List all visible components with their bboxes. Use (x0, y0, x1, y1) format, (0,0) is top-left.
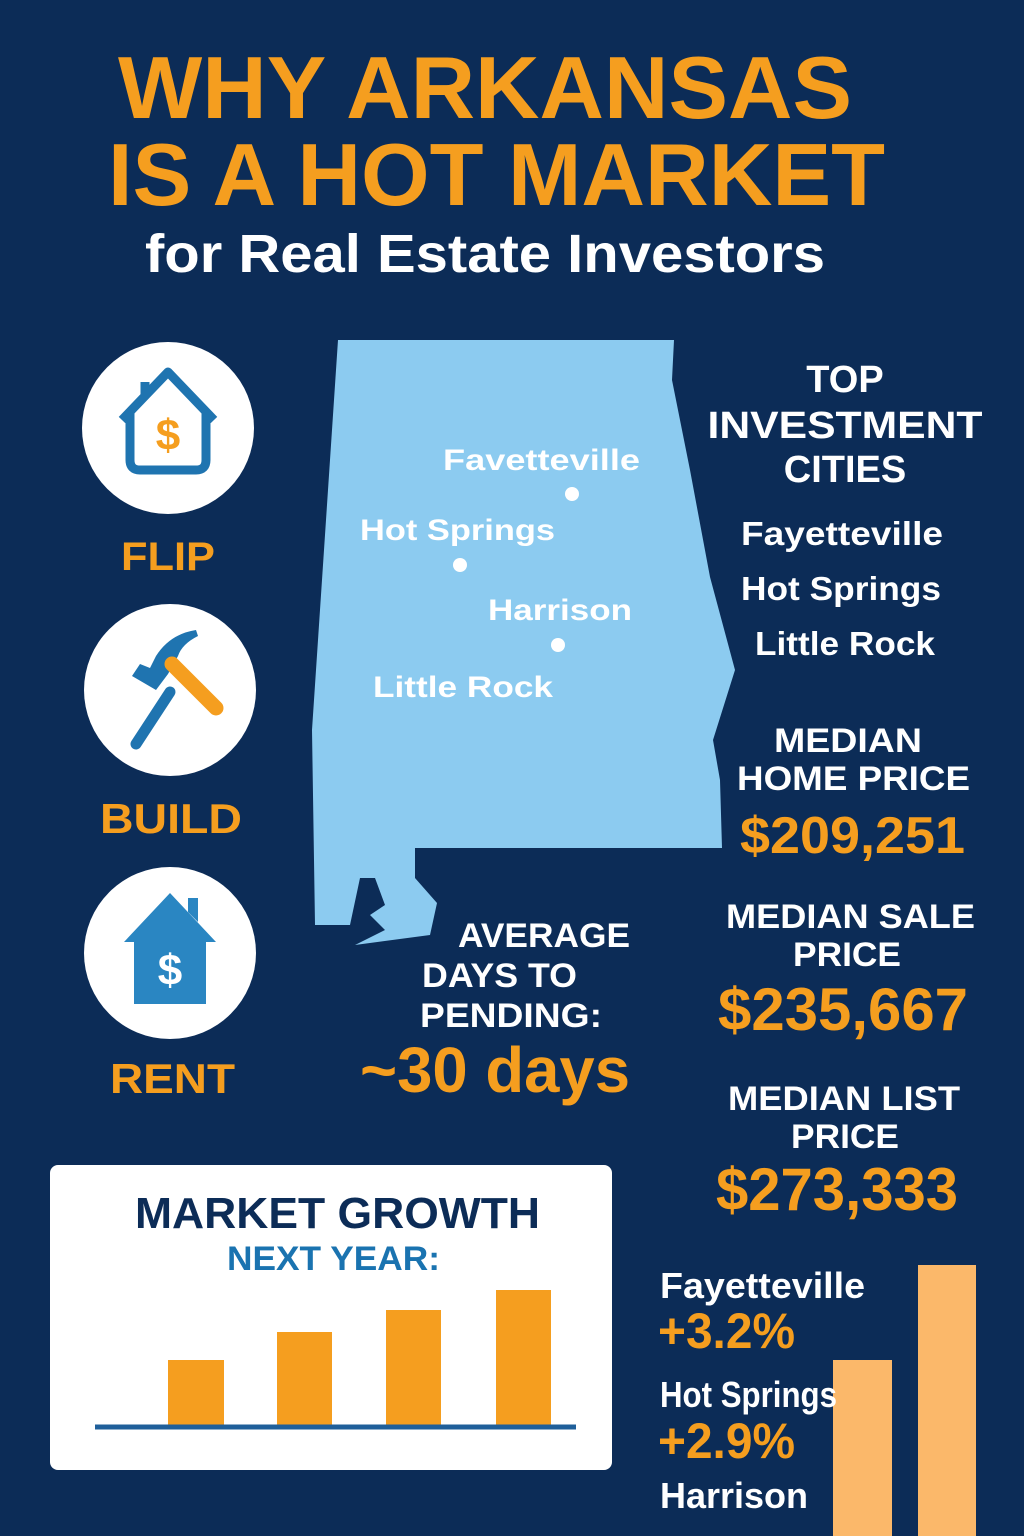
panel: market growth (50, 1165, 612, 1470)
title (108, 38, 885, 224)
stat: average days to pending: AVERAGE (458, 917, 630, 955)
label: RENT: RENT (110, 1055, 235, 1102)
stat: median home price: HOME PRICE (737, 760, 970, 798)
stat: median sale price: MEDIAN SALE (726, 898, 975, 936)
list: city growth: +2.9% (658, 1413, 795, 1469)
title: IS A HOT MARKET (108, 125, 885, 224)
label: FLIP: FLIP (121, 535, 215, 579)
map label: Harrison (488, 594, 632, 652)
stat: median list price: PRICE (791, 1118, 899, 1156)
panel subheading: NEXT YEAR: (227, 1240, 440, 1278)
list: city growth (658, 1265, 865, 1516)
list: city growth: Fayetteville (660, 1265, 865, 1306)
list: city growth: +3.2% (658, 1303, 795, 1359)
map label: Hot Springs: Hot Springs (360, 514, 555, 547)
bar chart (95, 1290, 576, 1427)
heading: top investment cities: INVESTMENT (708, 405, 982, 447)
stat: average days to pending (360, 917, 630, 1106)
heading: top investment cities: CITIES (784, 449, 906, 491)
map label: Fayetteville: Favetteville (443, 444, 640, 477)
stat: median home price (737, 722, 970, 865)
stat: average days to pending: ~30 days (360, 1034, 630, 1106)
map label: Little Rock: Little Rock (373, 671, 553, 704)
title: WHY ARKANSAS (118, 38, 852, 137)
panel heading: MARKET GROWTH (135, 1189, 540, 1238)
map label: Hot Springs (360, 514, 555, 572)
chart: growth bars right (833, 1265, 976, 1536)
icon: hammer (84, 604, 256, 776)
stat: median sale price: $235,667 (718, 976, 968, 1043)
list: city growth: Hot Springs (660, 1374, 837, 1415)
stat: median home price: MEDIAN (774, 722, 922, 760)
stat: median home price: $209,251 (740, 807, 965, 865)
stat: average days to pending: PENDING: (420, 997, 602, 1035)
map: Arkansas shape (312, 340, 735, 945)
list: cities: Hot Springs (741, 570, 941, 607)
list: cities: Little Rock (755, 625, 936, 662)
list: cities (741, 515, 943, 662)
heading: top investment cities: TOP (806, 359, 884, 401)
stat: average days to pending: DAYS TO (422, 957, 577, 995)
map label: Harrison: Harrison (488, 594, 632, 627)
label: BUILD: BUILD (100, 795, 242, 842)
subtitle: for Real Estate Investors (145, 224, 825, 284)
stat: median list price: MEDIAN LIST (728, 1080, 960, 1118)
icon: flip house: $ (156, 411, 180, 460)
icon: rent house: $ (158, 946, 182, 995)
stat: median sale price: PRICE (793, 936, 901, 974)
stat: median list price (716, 1080, 960, 1223)
icon: flip house (82, 342, 254, 514)
stat: median sale price (718, 898, 975, 1043)
icon: rent house (84, 867, 256, 1039)
stat: median list price: $273,333 (716, 1156, 958, 1223)
heading: top investment cities (708, 359, 982, 491)
list: city growth: Harrison (660, 1475, 808, 1516)
map label: Fayetteville (443, 444, 640, 501)
list: cities: Fayetteville (741, 515, 943, 552)
